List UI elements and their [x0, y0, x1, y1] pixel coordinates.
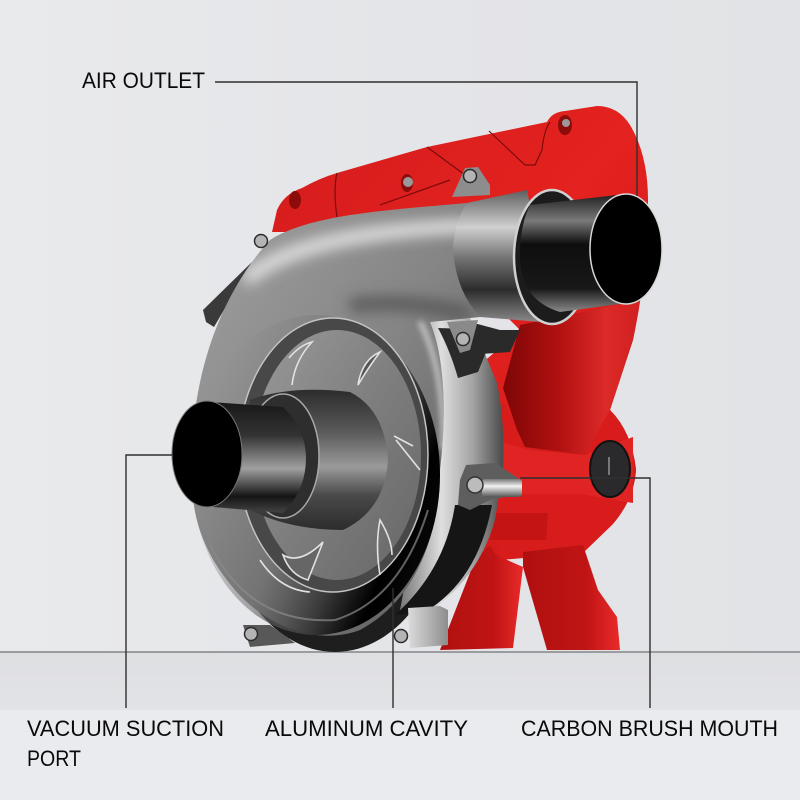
outlet tube: [520, 195, 627, 312]
leader line: aluminum cavity: [392, 588, 394, 708]
air outlet opening: [590, 194, 662, 304]
ring rim highlight: [210, 510, 428, 620]
inlet collar: [247, 394, 319, 518]
volute shading: [245, 226, 470, 450]
inlet hub: [250, 390, 388, 530]
front leg: [523, 545, 620, 650]
handle seams: [335, 122, 550, 217]
outlet collar: [514, 190, 590, 324]
pin bracket: [458, 463, 522, 510]
motor gill: [490, 513, 548, 540]
left black latch: [203, 262, 252, 327]
outlet sleeve: [453, 190, 553, 323]
label: carbon brush mouth: CARBON BRUSH MOUTH: [521, 716, 778, 741]
carbon brush cap: [590, 441, 630, 497]
left foot bracket: [243, 625, 295, 647]
front ring shading: [192, 315, 440, 635]
lower bracket plate: [447, 320, 478, 353]
label: aluminum cavity: ALUMINUM CAVITY: [265, 716, 468, 741]
label: vacuum suction port: VACUUM SUCTION: [27, 716, 224, 741]
side silver band: [400, 318, 503, 615]
handle arm: [503, 300, 640, 458]
floor line: [0, 651, 800, 653]
label: vacuum suction port: PORT: [27, 746, 81, 771]
inlet tube: [210, 402, 306, 513]
impeller window: [238, 318, 428, 592]
vacuum suction port opening: [172, 401, 242, 507]
rear flange: [217, 312, 453, 652]
inner rim: [420, 322, 443, 450]
bottom foot block: [408, 606, 448, 648]
impeller blades: [260, 342, 420, 592]
recess behind bracket: [438, 328, 495, 378]
lower shade near outlet: [350, 303, 470, 314]
leader line: vacuum suction port: [126, 455, 172, 708]
aluminum volute housing: [192, 203, 480, 636]
blower product illustration: [172, 106, 662, 652]
leader line: air outlet: [215, 82, 637, 196]
caption strip: [0, 710, 800, 800]
label: air outlet: AIR OUTLET: [82, 68, 205, 93]
leader line: carbon brush mouth: [520, 478, 650, 708]
top bracket: [452, 167, 490, 197]
red handle and motor housing: [272, 106, 648, 650]
motor plate: [503, 437, 633, 503]
floor band: [0, 652, 800, 710]
motor body: [480, 400, 636, 560]
lower bracket: [465, 322, 520, 355]
lower band shadow: [395, 505, 492, 615]
handle screws: [289, 115, 572, 209]
upper highlight sweep: [245, 226, 470, 280]
rear legs: [440, 545, 523, 650]
housing screws: [244, 170, 476, 642]
impeller disc: [253, 330, 421, 580]
